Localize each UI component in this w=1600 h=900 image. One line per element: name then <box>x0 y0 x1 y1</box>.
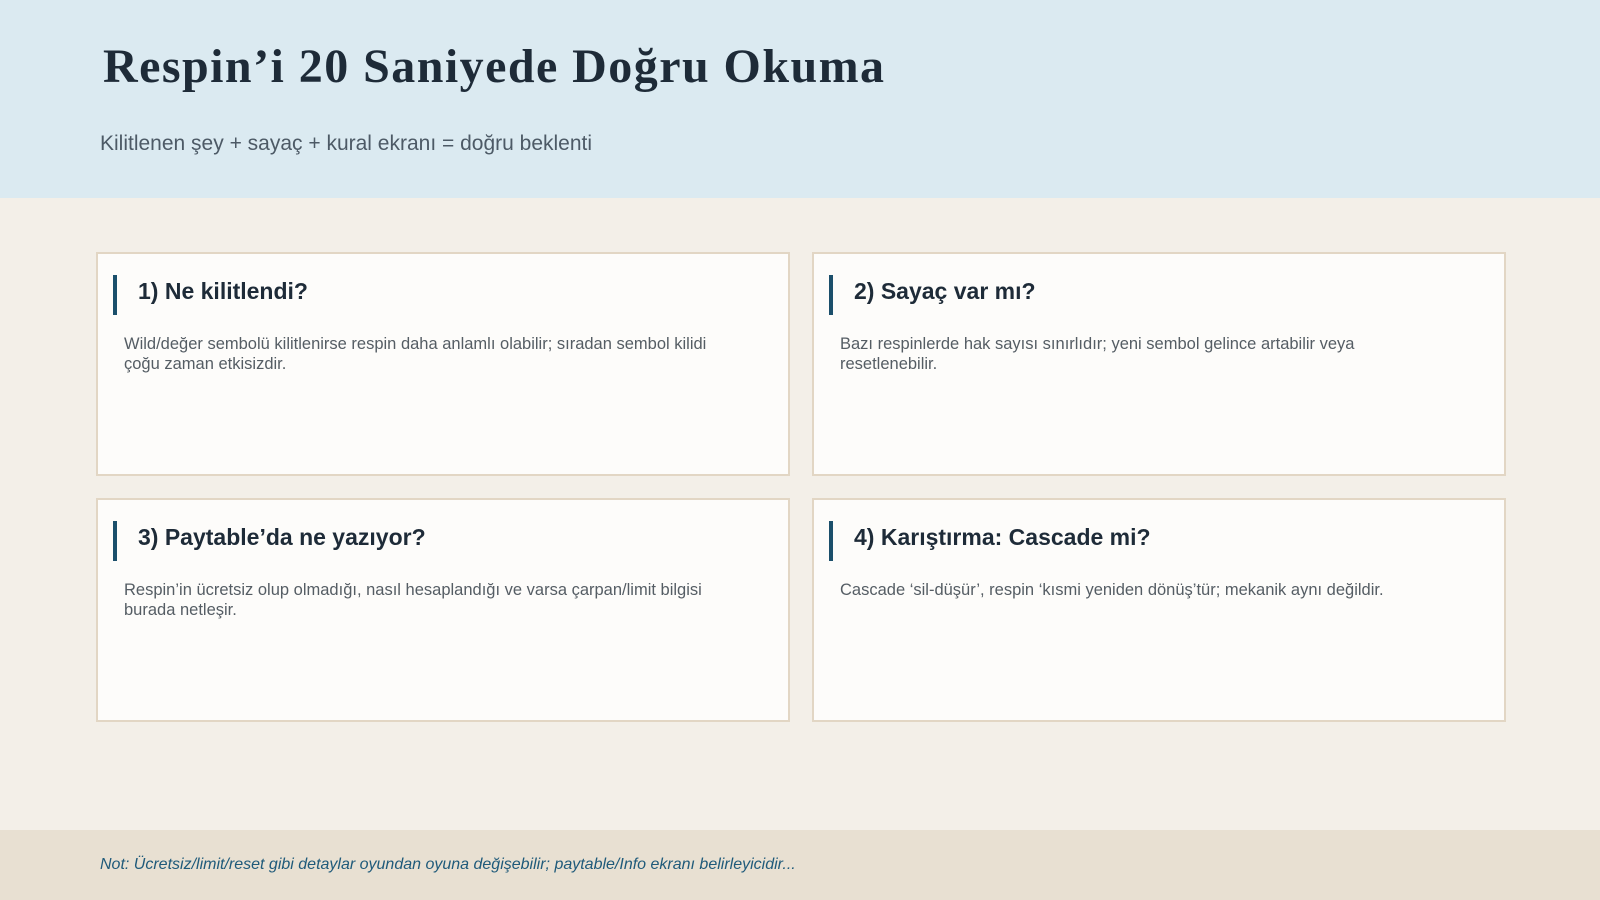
header band <box>0 0 1600 198</box>
text block: Cascade ‘sil-düşür’, respin ‘kısmi yeniden dönüş’tür; mekanik aynı değildir. <box>840 581 1384 599</box>
text block: Bazı respinlerde hak sayısı sınırlıdır; yeni sembol gelince artabilir veya <box>840 335 1354 353</box>
text block <box>124 335 706 373</box>
text block <box>124 581 702 619</box>
text block: resetlenebilir. <box>840 355 937 373</box>
text block: Respin’in ücretsiz olup olmadığı, nasıl hesaplandığı ve varsa çarpan/limit bilgisi <box>124 581 702 599</box>
footer <box>0 830 1600 900</box>
text block: burada netleşir. <box>124 601 237 619</box>
title: Respin’i 20 Saniyede Doğru Okuma <box>103 40 886 93</box>
text block: Wild/değer sembolü kilitlenirse respin daha anlamlı olabilir; sıradan sembol kilidi <box>124 335 706 353</box>
heading: 1) Ne kilitlendi? <box>138 278 308 304</box>
heading: 4) Karıştırma: Cascade mi? <box>854 524 1151 550</box>
text block: çoğu zaman etkisizdir. <box>124 355 286 373</box>
footer note: Not: Ücretsiz/limit/reset gibi detaylar oyundan oyuna değişebilir; paytable/Info ekranı belirleyicidir... <box>100 856 796 873</box>
subtitle: Kilitlenen şey + sayaç + kural ekranı = doğru beklenti <box>100 132 592 155</box>
heading: 2) Sayaç var mı? <box>854 278 1036 304</box>
panel: paytable <box>96 498 790 722</box>
panel: cascade <box>812 498 1506 722</box>
panel: ne kilitlendi <box>96 252 790 476</box>
panel: sayaç <box>812 252 1506 476</box>
heading: 3) Paytable’da ne yazıyor? <box>138 524 426 550</box>
text block <box>840 335 1354 373</box>
